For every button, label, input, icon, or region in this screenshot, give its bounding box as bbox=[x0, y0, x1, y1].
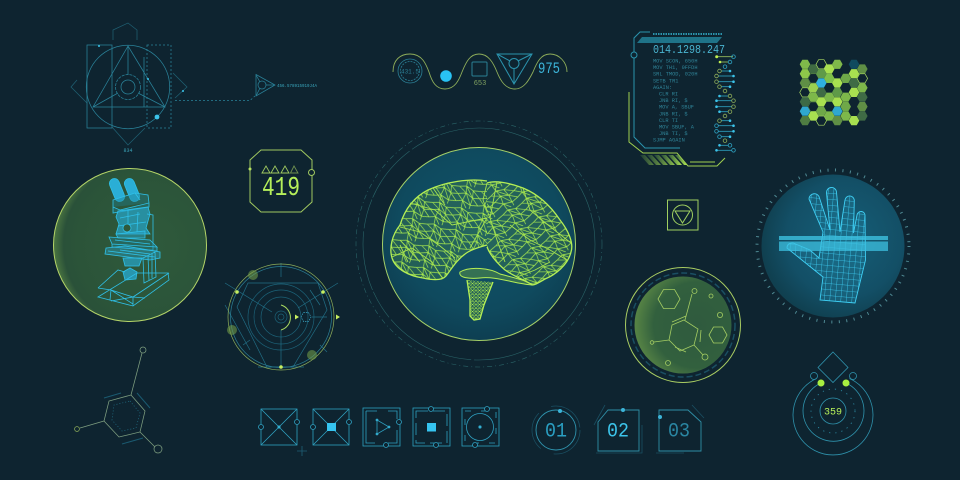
text block: assembly code: MOV SBUF, A bbox=[659, 124, 695, 130]
text block: assembly code bbox=[653, 58, 698, 144]
readout: 975: 975 bbox=[538, 60, 560, 78]
diagram: sacred geometry: 834 bbox=[123, 148, 133, 154]
text block: assembly code: SJMP AGAIN bbox=[653, 138, 685, 144]
badge: 03 bbox=[656, 405, 704, 453]
readout: 653 square bbox=[472, 62, 487, 88]
heading: code number: 014.1298.247 bbox=[653, 44, 725, 57]
panel: central brain sphere bbox=[356, 121, 602, 367]
text block: assembly code: JNB TI, $ bbox=[659, 131, 688, 137]
text block: assembly code: SETB TR1 bbox=[653, 78, 678, 84]
diagram: benzene molecule bbox=[75, 347, 162, 453]
text block: assembly code: MOV TH1, 0FFDH bbox=[653, 65, 698, 71]
icon: triangle button bbox=[668, 200, 698, 230]
icon: triangle with circle bbox=[497, 54, 532, 84]
text block: assembly code: JNB RI, $ bbox=[659, 98, 688, 104]
panel: microscope sphere bbox=[54, 168, 206, 322]
text block: assembly code: JNB RI, $ bbox=[659, 111, 688, 117]
gauge: radar target bbox=[225, 263, 340, 370]
icon: square cross bbox=[258, 409, 300, 445]
badge: 02 bbox=[594, 405, 642, 453]
callout: dotted leader and triangle label bbox=[175, 74, 317, 100]
text block: assembly code: SRL TMOD, 020H bbox=[653, 72, 698, 78]
chart: hexagon heat grid bbox=[800, 60, 868, 125]
badge: 01 bbox=[532, 406, 580, 454]
icon: wireframe brain bbox=[385, 175, 579, 322]
wave status strip bbox=[393, 54, 567, 89]
gauge: 359 dial: 359 bbox=[824, 408, 842, 418]
badge: 03: 03 bbox=[668, 420, 690, 444]
scan band bbox=[779, 236, 888, 251]
readout: 653 square: 653 bbox=[474, 80, 486, 88]
badge: 419 counter: 419 bbox=[262, 174, 300, 204]
icon: circle frame bbox=[462, 406, 499, 448]
stripes bbox=[640, 155, 687, 165]
icon: triangle frame bbox=[363, 408, 402, 448]
icon: square cross with block bbox=[310, 409, 352, 445]
badge: 02: 02 bbox=[607, 420, 629, 444]
icon: DNA helix bbox=[715, 55, 735, 152]
icon: square frame with block bbox=[413, 406, 450, 448]
text block: assembly code: MOV A, SBUF bbox=[659, 105, 694, 111]
diagram: sacred geometry bbox=[71, 23, 187, 154]
text block: assembly code: AGAIN: bbox=[653, 85, 672, 91]
gauge: 359 dial bbox=[793, 352, 873, 455]
icon: microscope bbox=[98, 177, 169, 306]
gauge: ring readout: 431.5 bbox=[401, 68, 419, 76]
icons: button row bbox=[258, 406, 499, 456]
gauge: ring readout bbox=[398, 59, 422, 83]
icon: blue dot bbox=[440, 70, 452, 82]
text block: assembly code: CLR TI bbox=[659, 118, 678, 124]
text block: assembly code: MOV SCON, 650H bbox=[653, 58, 698, 64]
badge: 419 counter bbox=[248, 150, 314, 212]
callout: dotted leader and triangle label: 456.578915919J4A bbox=[277, 83, 317, 89]
text block: assembly code: CLR RI bbox=[659, 92, 678, 98]
badge: 01: 01 bbox=[545, 420, 567, 444]
panel: hand scan sphere bbox=[757, 170, 909, 322]
panel: petri dish molecule bbox=[626, 268, 740, 382]
icon: wireframe hand bbox=[786, 187, 866, 304]
panel: code terminal bbox=[629, 32, 735, 166]
